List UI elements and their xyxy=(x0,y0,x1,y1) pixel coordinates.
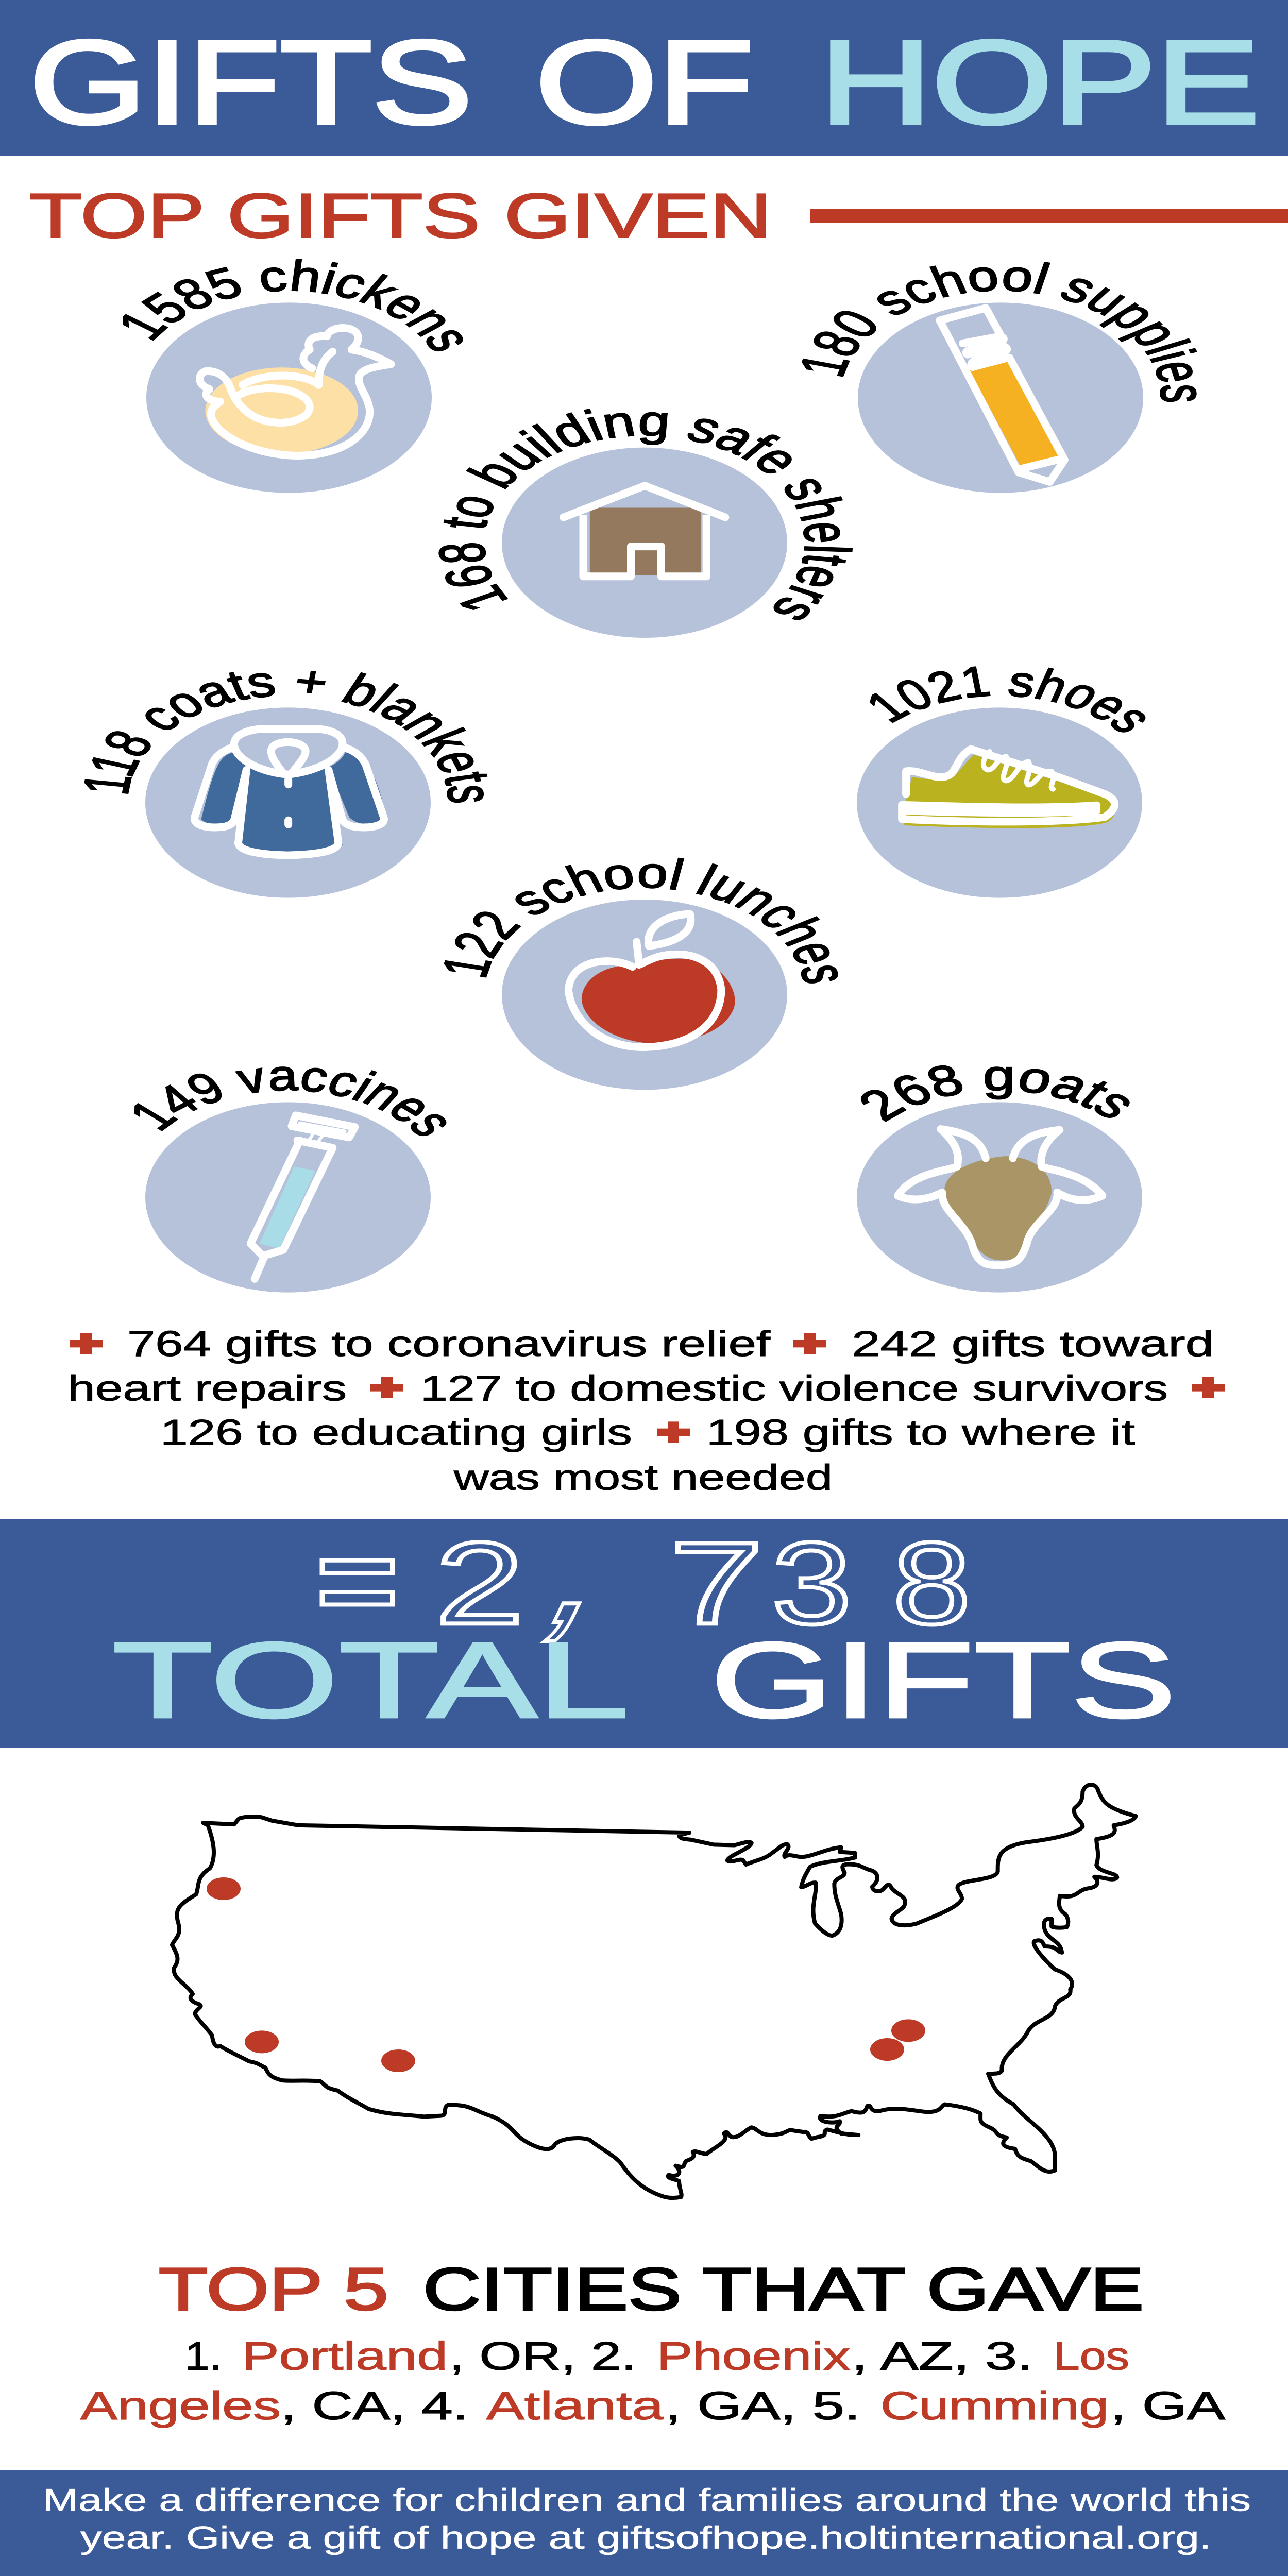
heading: top gifts given: TOP GIFTS GIVEN xyxy=(29,180,772,251)
text block: footer message: year. Give a gift of hope at giftsofhope.holtinternational.org. xyxy=(80,2520,1211,2555)
text block: other gifts: 242 gifts toward xyxy=(852,1323,1214,1364)
panel: coats and blankets: 118 coats + blankets xyxy=(84,671,487,803)
text block: city list: , GA, 5. xyxy=(665,2384,860,2428)
heading: total gifts: TOTAL xyxy=(112,1620,629,1740)
title: gifts of hope: GIFTS xyxy=(29,16,472,149)
panel: goats xyxy=(857,1065,1142,1293)
heading: top 5 cities xyxy=(159,2255,1144,2323)
text block: other gifts: 198 gifts to where it xyxy=(706,1412,1135,1452)
text block: city list: Angeles xyxy=(80,2384,281,2428)
icon: syringe xyxy=(250,1115,355,1279)
icon: coat xyxy=(194,728,387,855)
panel: footer call to action xyxy=(0,2470,1288,2576)
icon: apple xyxy=(568,914,735,1047)
number: 2,738 outlined: 3 xyxy=(772,1518,852,1649)
text block: city list: Los xyxy=(1054,2334,1129,2378)
icon: goat xyxy=(898,1129,1103,1265)
panel: chickens xyxy=(123,259,463,493)
number: 2,738 outlined: 7 xyxy=(669,1518,764,1649)
text block: other gifts: was most needed xyxy=(453,1457,833,1497)
text block: city list: Phoenix xyxy=(657,2334,850,2378)
text block: city list: , AZ, 3. xyxy=(852,2334,1033,2378)
text block: other gifts: 764 gifts to coronavirus relief xyxy=(127,1323,770,1364)
panel: chickens: 1585 chickens xyxy=(123,259,463,351)
text block: city list: , CA, 4. xyxy=(281,2384,468,2428)
number: 2,738 outlined: 8 xyxy=(893,1518,971,1649)
city markers xyxy=(207,1877,925,2072)
text block: city list: Cumming xyxy=(880,2384,1109,2428)
panel: school lunches xyxy=(444,857,838,1090)
number: 2,738 outlined: 2 xyxy=(435,1518,524,1649)
heading: total gifts xyxy=(112,1620,1176,1740)
panel: school supplies: 180 school supplies xyxy=(802,262,1197,402)
text block: city list: , GA xyxy=(1110,2384,1225,2428)
icon: plus xyxy=(793,1333,826,1354)
panel: title banner xyxy=(0,0,1288,156)
text block: city list: Portland xyxy=(242,2334,448,2378)
icon: plus xyxy=(370,1377,403,1398)
text block: footer message xyxy=(43,2482,1251,2555)
panel: coats and blankets xyxy=(84,671,487,898)
text block: city list xyxy=(80,2334,1225,2428)
map outline xyxy=(172,1785,1136,2198)
icon: plus xyxy=(70,1333,103,1354)
icon: house xyxy=(564,486,725,577)
heading: top gifts given xyxy=(29,180,1288,251)
text block: city list: Atlanta xyxy=(486,2384,664,2428)
number: 2,738 outlined xyxy=(316,1510,971,1649)
title: gifts of hope xyxy=(29,16,1260,149)
text block: other gifts: 126 to educating girls xyxy=(160,1412,632,1452)
text block: city list: 1. xyxy=(185,2334,222,2378)
panel: school supplies xyxy=(802,262,1197,493)
number: 2,738 outlined: , xyxy=(533,1510,633,1649)
panel: shoes xyxy=(857,666,1146,898)
panel: shoes: 1021 shoes xyxy=(870,666,1146,733)
text block: other gifts: 127 to domestic violence survivors xyxy=(420,1368,1168,1409)
map: united states with city markers xyxy=(172,1785,1136,2198)
number: 2,738 outlined: = xyxy=(316,1516,398,1646)
panel: vaccines: 149 vaccines xyxy=(134,1066,446,1137)
panel: total gifts banner xyxy=(0,1510,1288,1748)
heading: top 5 cities: CITIES THAT GAVE xyxy=(423,2255,1144,2323)
icon: plus xyxy=(657,1421,690,1443)
text block: city list: , OR, 2. xyxy=(449,2334,636,2378)
panel: school lunches: 122 school lunches xyxy=(444,857,838,984)
icon: chicken xyxy=(199,328,391,456)
icon: plus xyxy=(1192,1377,1225,1398)
text block: other gifts: heart repairs xyxy=(67,1368,347,1409)
panel: goats: 268 goats xyxy=(860,1065,1130,1122)
icon: pencil xyxy=(940,308,1068,482)
text block: other gifts xyxy=(67,1323,1225,1497)
heading: top 5 cities: TOP 5 xyxy=(159,2255,388,2323)
icon: shoe xyxy=(902,749,1115,828)
panel: safe shelters: 168 to building safe shelters xyxy=(438,409,853,620)
panel: vaccines xyxy=(134,1066,446,1293)
heading: total gifts: GIFTS xyxy=(710,1620,1176,1740)
title: gifts of hope: OF xyxy=(535,16,754,149)
